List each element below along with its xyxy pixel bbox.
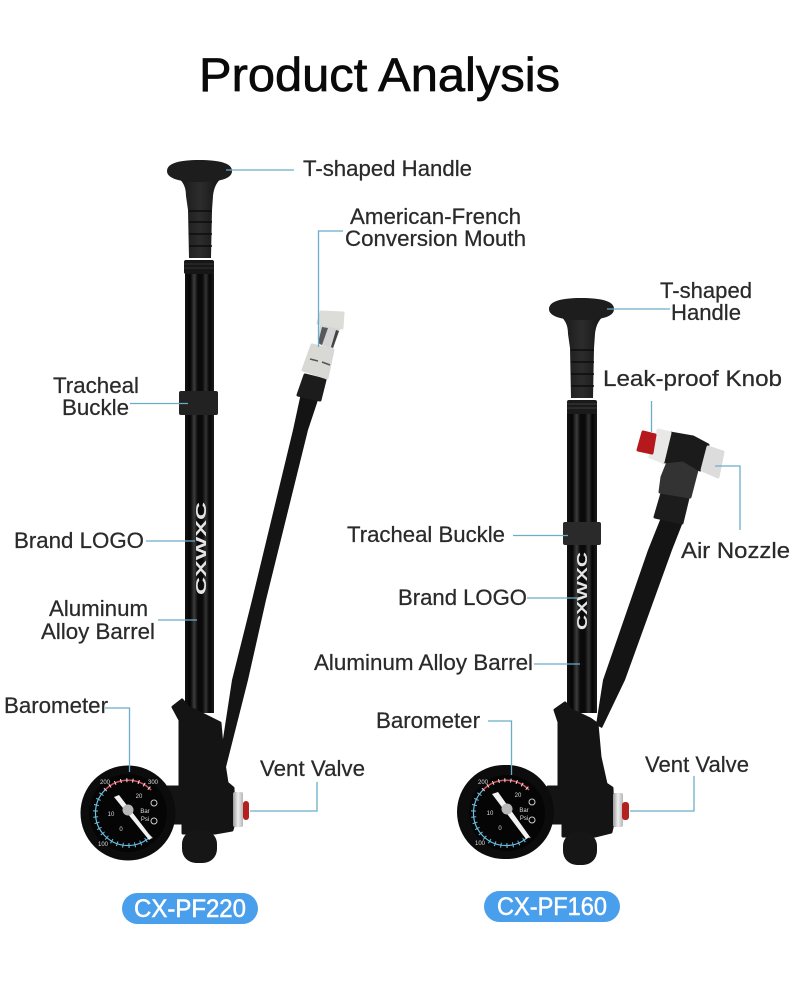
vent valve — [613, 793, 629, 827]
callout: Vent Valve (right): Vent Valve — [645, 752, 749, 777]
hose connector: American-French conversion mouth — [298, 312, 343, 400]
title: Product Analysis — [199, 48, 560, 101]
callout: American-French Conversion Mouth: Conversion Mouth — [345, 226, 526, 251]
bottom knob — [182, 830, 217, 863]
callout: Tracheal Buckle (left): Buckle — [62, 395, 129, 420]
callout: Air Nozzle: Air Nozzle — [681, 538, 790, 563]
callout: Brand LOGO (right): Brand LOGO — [398, 585, 527, 610]
model badge: CX-PF220: CX-PF220 — [134, 895, 246, 923]
pump body — [548, 703, 613, 836]
callout: Aluminum Alloy Barrel (left): Aluminum — [49, 596, 148, 621]
tracheal buckle — [179, 391, 218, 415]
brand logo: CXWXC — [193, 502, 210, 595]
callout: Tracheal Buckle (right): Tracheal Buckle — [347, 522, 505, 547]
callout: Vent Valve (left): Vent Valve — [260, 756, 365, 781]
callout: American-French Conversion Mouth: American-French — [350, 204, 521, 229]
barometer: 0 — [498, 826, 502, 832]
barometer: Bar — [140, 809, 150, 815]
T-shaped handle — [549, 298, 614, 414]
barometer: 100 — [98, 842, 109, 848]
callout: T-shaped Handle (left): T-shaped Handle — [303, 156, 472, 181]
barometer: 20 — [515, 793, 522, 799]
callout: T-shaped Handle (right): Handle — [671, 300, 741, 325]
barrel — [567, 413, 597, 713]
callout: Brand LOGO (left): Brand LOGO — [14, 528, 144, 553]
vent valve — [233, 792, 249, 827]
T-shaped handle — [167, 160, 232, 274]
barometer: 20 — [136, 794, 143, 800]
callout: Vent Valve (left) — [250, 756, 365, 811]
brand logo: CXWXC — [574, 552, 591, 630]
callout: T-shaped Handle (right): T-shaped — [660, 278, 752, 303]
pump: CX-PF160 — [457, 298, 723, 865]
callout: American-French Conversion Mouth — [318, 204, 526, 347]
barrel — [185, 273, 214, 713]
barometer: 100 — [475, 841, 486, 847]
callout: Aluminum Alloy Barrel (left) — [41, 596, 197, 644]
hose connector: leak-proof knob and air nozzle — [638, 430, 723, 523]
barometer: 10 — [108, 812, 115, 818]
tracheal buckle — [563, 522, 601, 545]
barometer: Psi — [141, 817, 149, 823]
callout: Tracheal Buckle (left): Tracheal — [53, 373, 139, 398]
callout: Leak-proof Knob: Leak-proof Knob — [603, 366, 782, 391]
bottom knob — [563, 832, 597, 865]
barometer: 0 — [119, 827, 123, 833]
hose — [219, 393, 319, 775]
callout: Air Nozzle — [681, 466, 790, 563]
barometer — [80, 766, 176, 860]
callout: Barometer (left): Barometer — [4, 693, 108, 718]
callout: Barometer (right): Barometer — [376, 708, 480, 733]
model badge: CX-PF160: CX-PF160 — [497, 893, 607, 921]
callout: Tracheal Buckle (left) — [53, 373, 188, 420]
callout: Aluminum Alloy Barrel (right): Aluminum Alloy Barrel — [314, 650, 533, 675]
pump body — [167, 700, 234, 833]
callout: Barometer (right) — [376, 708, 512, 775]
hose — [596, 515, 683, 728]
barometer: 200 — [478, 780, 489, 786]
barometer: Bar — [519, 808, 529, 814]
barometer: 10 — [487, 811, 494, 817]
barometer: 200 — [100, 780, 111, 786]
callout: T-shaped Handle (right) — [607, 278, 752, 325]
barometer: 300 — [148, 780, 159, 786]
barometer — [457, 765, 554, 859]
callout: Barometer (left) — [4, 693, 130, 772]
callout: Vent Valve (right) — [630, 752, 749, 811]
pump: CX-PF220 — [80, 160, 343, 863]
barometer: Psi — [520, 816, 528, 822]
callout: Aluminum Alloy Barrel (left): Alloy Barrel — [41, 619, 155, 644]
